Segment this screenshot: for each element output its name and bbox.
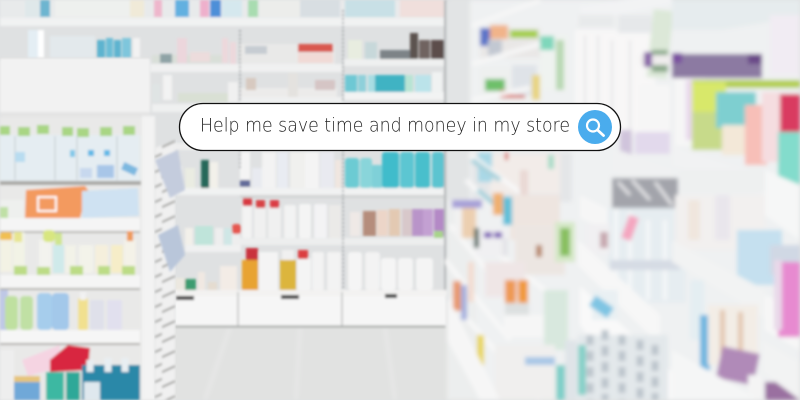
center back shelves bbox=[0, 0, 447, 326]
right aisle wall and shelves bbox=[445, 0, 800, 400]
left gondola unit bbox=[0, 58, 185, 400]
unit shelves and products bbox=[0, 116, 155, 400]
search bar pill bbox=[180, 104, 620, 150]
hanging packages on side panel bbox=[155, 150, 185, 272]
floor bbox=[165, 326, 475, 400]
search query text: Help me save time and money in my store bbox=[200, 116, 570, 136]
slatted side panel bbox=[155, 140, 175, 400]
near column bbox=[672, 0, 800, 30]
search bar bbox=[180, 104, 620, 150]
middle column bbox=[575, 30, 655, 135]
inner lower shelves bbox=[472, 152, 572, 202]
inner column products bbox=[480, 28, 540, 58]
icon: search button bbox=[578, 110, 612, 144]
unit header bbox=[0, 58, 150, 118]
